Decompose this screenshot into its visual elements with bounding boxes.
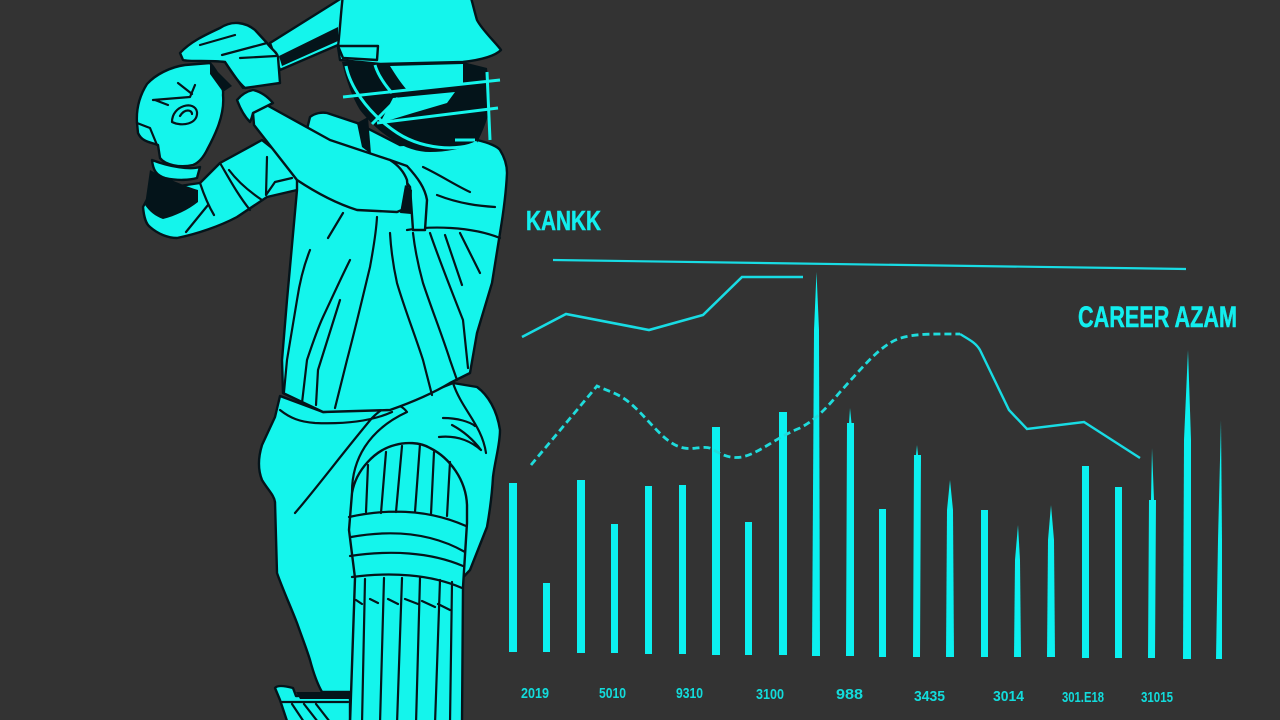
- back arm: [143, 140, 300, 238]
- illustration: cricket batter: [137, 0, 507, 720]
- top glove: [180, 23, 280, 122]
- pants: [259, 383, 500, 692]
- bat: [270, 0, 345, 70]
- x-axis year labels: 9310: [676, 685, 703, 702]
- x-axis year labels: 3100: [756, 686, 784, 703]
- x-axis year labels: 3014: [993, 688, 1025, 705]
- bar chart: [509, 272, 1222, 659]
- x-axis year labels: 3435: [914, 688, 945, 705]
- upper line series: [522, 277, 803, 337]
- x-axis year labels: 2019: [521, 685, 549, 702]
- x-axis year labels: [521, 685, 1173, 706]
- top rule line: [553, 260, 1186, 269]
- solid line series continuation: [960, 334, 1140, 458]
- lower glove: [137, 63, 232, 180]
- x-axis year labels: 301.E18: [1062, 689, 1104, 706]
- leg pad: [349, 443, 467, 720]
- chart heading: KANKK: KANKK: [526, 205, 601, 236]
- torso: [282, 113, 507, 412]
- x-axis year labels: 988: [836, 686, 863, 703]
- x-axis year labels: 5010: [599, 685, 626, 702]
- helmet and face guard: [338, 0, 501, 152]
- sleeve: [390, 160, 500, 238]
- front arm: [253, 103, 412, 214]
- x-axis year labels: 31015: [1141, 689, 1173, 706]
- dashed line series: [531, 334, 960, 465]
- shoe: [275, 686, 350, 720]
